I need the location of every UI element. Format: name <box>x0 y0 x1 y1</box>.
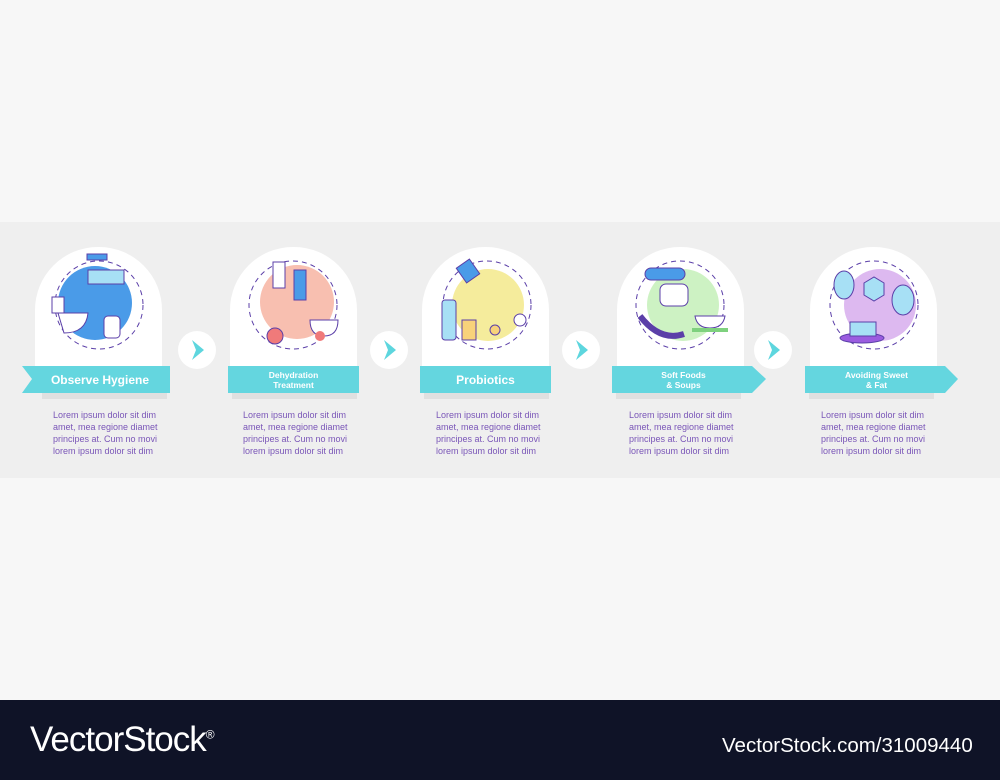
text 3: Lorem ipsum dolor sit dim amet, mea regione diamet principes at. Cum no movi lorem ipsum dolor sit dim <box>436 410 541 456</box>
label: observe hygiene: Observe Hygiene <box>51 372 149 386</box>
label: dehydration: Treatment <box>273 380 314 390</box>
footer logo: VectorStock® <box>30 720 214 759</box>
text 4: Lorem ipsum dolor sit dim amet, mea regione diamet principes at. Cum no movi lorem ipsum dolor sit dim <box>629 410 734 456</box>
icon: hygiene <box>52 254 143 349</box>
arrow: 4-5 <box>768 340 780 360</box>
label: soft foods: & Soups <box>666 380 701 390</box>
label: soft foods <box>661 370 706 390</box>
label: soft foods: Soft Foods <box>661 370 706 380</box>
arrow: 1-2 <box>192 340 204 360</box>
card: observe hygiene <box>35 247 162 377</box>
label: avoiding sweet: Avoiding Sweet <box>845 370 908 380</box>
text 5: Lorem ipsum dolor sit dim amet, mea regione diamet principes at. Cum no movi lorem ipsum dolor sit dim <box>821 410 926 456</box>
arrow: 3-4 <box>576 340 588 360</box>
card: dehydration <box>230 247 357 377</box>
card: soft foods <box>617 247 744 377</box>
icon: avoiding sweet <box>830 261 918 349</box>
label: avoiding sweet: & Fat <box>866 380 887 390</box>
card: probiotics <box>422 247 549 377</box>
footer <box>0 700 1000 780</box>
label: avoiding sweet <box>845 370 908 390</box>
banner shapes <box>22 366 958 393</box>
footer url: VectorStock.com/31009440 <box>722 734 973 757</box>
label: dehydration: Dehydration <box>269 370 318 380</box>
card: avoiding sweet <box>810 247 937 377</box>
text 1: Lorem ipsum dolor sit dim amet, mea regione diamet principes at. Cum no movi lorem ipsum dolor sit dim <box>53 410 158 456</box>
label: dehydration <box>269 370 318 390</box>
icon: soft foods <box>636 261 728 349</box>
label: probiotics: Probiotics <box>456 372 515 386</box>
arrow circles <box>178 331 216 369</box>
banner shadows <box>42 393 934 399</box>
icon: dehydration <box>249 261 338 349</box>
icons <box>52 254 918 350</box>
icon: probiotics <box>442 259 531 349</box>
text 2: Lorem ipsum dolor sit dim amet, mea regione diamet principes at. Cum no movi lorem ipsum dolor sit dim <box>243 410 348 456</box>
arrow: 2-3 <box>384 340 396 360</box>
